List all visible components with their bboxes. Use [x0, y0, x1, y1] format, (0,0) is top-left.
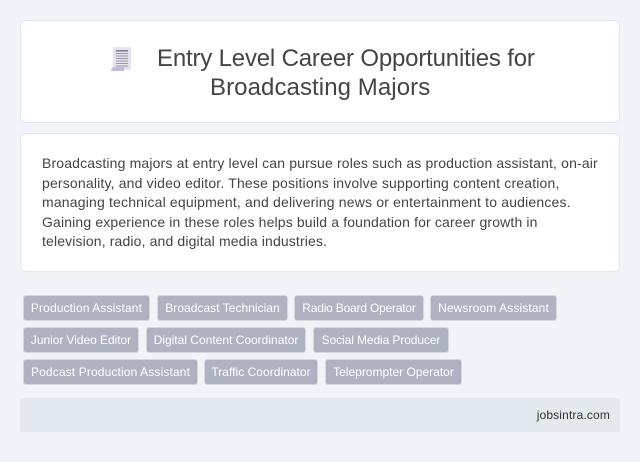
tag: Radio Board Operator: [294, 295, 424, 321]
text block: description: [42, 155, 598, 249]
tag: Teleprompter Operator: Teleprompter Operator: [333, 365, 454, 379]
text block: description: television, radio, and digital media industries.: [42, 233, 327, 249]
tag: Production Assistant: [23, 295, 150, 321]
tag: Traffic Coordinator: Traffic Coordinator: [211, 365, 311, 379]
title: Entry Level Career Opportunities for: [157, 45, 535, 72]
panel: description: [20, 133, 620, 272]
tag: Radio Board Operator: Radio Board Operator: [302, 301, 416, 315]
text block: description: Gaining experience in these roles helps build a foundation for career growth in: [42, 214, 538, 230]
tag: Teleprompter Operator: [325, 359, 462, 385]
footer bar: [20, 398, 620, 432]
tag: Broadcast Technician: [157, 295, 288, 321]
panel: title card: [20, 20, 620, 123]
tag: Podcast Production Assistant: [23, 359, 198, 385]
tag: Podcast Production Assistant: Podcast Production Assistant: [31, 365, 190, 379]
tag: Newsroom Assistant: Newsroom Assistant: [438, 301, 549, 315]
tag: Junior Video Editor: [23, 327, 139, 353]
tag: Traffic Coordinator: [204, 359, 318, 385]
tag: Social Media Producer: Social Media Producer: [322, 333, 440, 347]
icon: document scroll: [111, 47, 131, 71]
tag: Junior Video Editor: Junior Video Editor: [31, 333, 131, 347]
title: Broadcasting Majors: [210, 74, 430, 101]
tag: Newsroom Assistant: [430, 295, 557, 321]
tag list: [23, 295, 557, 385]
tag: Digital Content Coordinator: [146, 327, 306, 353]
tag: Digital Content Coordinator: Digital Content Coordinator: [154, 333, 298, 347]
text block: description: managing technical equipment, and delivering news or entertainment to audiences.: [42, 194, 571, 210]
footer: source: jobsintra.com: [537, 408, 610, 422]
tag: Broadcast Technician: Broadcast Technician: [165, 301, 280, 315]
text block: description: Broadcasting majors at entry level can pursue roles such as production assistant, on-air: [42, 155, 598, 171]
title: [157, 45, 535, 101]
tag: Social Media Producer: [313, 327, 449, 353]
text block: description: personality, and video editor. These positions involve supporting content creation,: [42, 175, 560, 191]
tag: Production Assistant: Production Assistant: [31, 301, 142, 315]
